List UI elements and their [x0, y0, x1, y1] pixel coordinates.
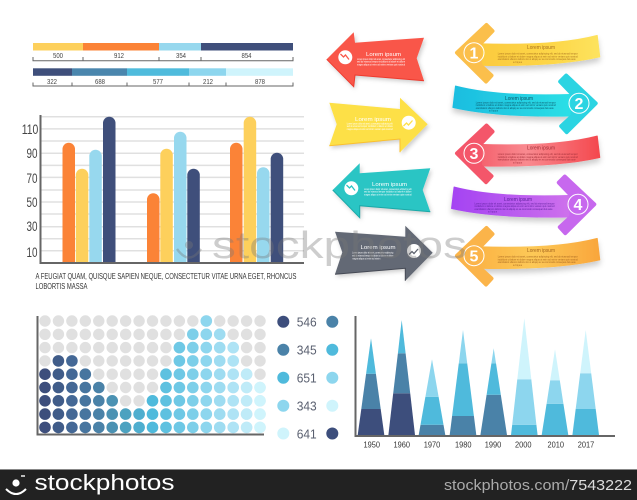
arrow: yellow right: [329, 98, 428, 152]
legend: [277, 314, 338, 442]
arrow text: Lorem ipsum dolor sit amet, consectetur adipiscing elit: [364, 187, 412, 191]
triangle chart: [356, 316, 615, 449]
year labels: 2000: [515, 440, 532, 449]
triangle 1960: [388, 320, 415, 435]
arrow text: [364, 182, 412, 196]
y axis labels: 110: [22, 122, 38, 137]
footer url: stockphotos.com/ 7543222: [444, 477, 632, 494]
numbered arrow 1: incididunt ut labore et dolore magna aliqua ut enim ad minim veniam quis nostrud: [498, 54, 578, 58]
segmented bar: warm: 354: [176, 53, 186, 60]
numbered arrow 4: Lorem ipsum dolor sit amet, consectetur adipiscing elit, sed do eiusmod tempor: [474, 202, 555, 206]
triangle 2017: [572, 330, 599, 435]
segmented bar: blue: 212: [203, 79, 213, 86]
bar group 2: [147, 132, 200, 262]
arrow: red left: [327, 32, 424, 87]
arrow: grey right: [335, 226, 433, 281]
numbered arrow 5: aliqua: [513, 263, 523, 267]
bar chart: [22, 115, 304, 263]
arrow text: Lorem ipsum: [372, 182, 407, 188]
numbered arrow 1: exercitation ullamco laboris nisi ut aliquip ex ea commodo consequat duis aute: [498, 57, 576, 61]
y axis labels: 90: [26, 146, 38, 161]
numbered arrow 2: exercitation ullamco laboris nisi ut aliquip ex ea commodo consequat duis aute: [476, 106, 554, 110]
numbered arrow 1: Lorem ipsum dolor sit amet, consectetur adipiscing elit, sed do eiusmod tempor: [498, 52, 578, 56]
numbered arrow 3: aliqua: [513, 161, 523, 165]
numbered arrow 2: Lorem ipsum dolor sit amet, consectetur adipiscing elit, sed do eiusmod tempor: [476, 100, 556, 104]
bar group 1: [62, 117, 116, 262]
icon: chart circle: [344, 181, 358, 195]
numbered arrow 4: Lorem ipsum: [504, 197, 532, 203]
numbered arrow 1: 1: [470, 46, 479, 62]
legend: 343: [297, 398, 317, 414]
numbered arrow 2: 2: [575, 96, 584, 113]
numbered arrow 2: Lorem ipsum: [505, 96, 533, 102]
year labels: 2017: [578, 440, 595, 449]
arrow: teal left: [333, 163, 430, 218]
arrow text: sed do eiusmod tempor incididunt ut labore et dolore: [347, 124, 393, 128]
watermark: stockphotos: [212, 225, 467, 267]
legend: 546: [297, 314, 317, 330]
numbered arrow 2: aliqua: [489, 109, 499, 113]
numbered arrow 4: incididunt ut labore et dolore magna aliqua ut enim ad minim veniam quis nostrud: [474, 204, 555, 208]
segmented bar: blue: 577: [153, 79, 163, 86]
y axis labels: [22, 122, 38, 260]
arrow text: Lorem ipsum dolor sit amet, consectetur adipiscing elit: [357, 57, 405, 61]
arrow text: Lorem ipsum dolor sit amet, consectetur adipiscing elit: [347, 122, 393, 126]
arrow text: magna aliqua ut enim ad minim veniam quis nostrud: [357, 62, 405, 66]
arrow text: magna aliqua ut enim ad minim veniam quis nostrud: [364, 192, 412, 196]
arrow text: magna aliqua ut enim ad minim: [352, 256, 380, 260]
numbered arrow 4: exercitation ullamco laboris nisi ut aliquip ex ea commodo consequat duis aute: [474, 207, 553, 211]
year labels: 1990: [485, 440, 502, 449]
numbered arrow 4: 4: [574, 197, 583, 214]
year labels: 1950: [363, 440, 380, 449]
numbered arrow 2: [453, 76, 596, 132]
numbered arrow 2: incididunt ut labore et dolore magna aliqua ut enim ad minim veniam quis nostrud: [476, 103, 556, 107]
arrow text: Lorem ipsum: [360, 245, 396, 251]
legend: 345: [297, 342, 317, 358]
arrow text: [357, 52, 405, 66]
arrow text: magna aliqua ut enim ad minim veniam quis nostrud: [347, 127, 393, 131]
year labels: 1980: [455, 440, 472, 449]
bar group 3: [230, 117, 283, 262]
numbered arrow 3: [457, 126, 600, 182]
icon: chart circle: [338, 50, 352, 64]
y axis labels: 70: [26, 171, 38, 186]
year labels: 1960: [393, 440, 410, 449]
numbered arrow 3: 3: [470, 146, 479, 163]
legend: 651: [297, 370, 317, 386]
numbered arrow 3: exercitation ullamco laboris nisi ut aliquip ex ea commodo consequat duis aute: [498, 158, 576, 162]
icon: chart circle: [407, 244, 421, 258]
chart caption: LOBORTIS MASSA: [36, 282, 88, 291]
y axis labels: 50: [26, 195, 38, 210]
numbered arrow 5: Lorem ipsum dolor sit amet, consectetur adipiscing elit, sed do eiusmod tempor: [498, 254, 578, 258]
segmented bar: warm: [33, 43, 293, 61]
arrow text: Lorem ipsum dolor sit amet, consectetur adipiscing: [352, 251, 394, 255]
segmented bar: blue: 688: [95, 79, 105, 86]
arrow text: sed do eiusmod tempor incididunt ut labore et dolore: [357, 60, 405, 64]
segmented bar: blue: 322: [47, 79, 57, 86]
footer logo: stockphotos: [34, 470, 174, 495]
footer band: [0, 469, 637, 500]
numbered arrow 5: [457, 228, 600, 284]
footer logo: [6, 470, 174, 495]
triangle 2010: [542, 349, 568, 435]
numbered arrow 3: Lorem ipsum: [527, 146, 555, 152]
numbered arrow 5: 5: [470, 248, 479, 266]
chart caption: [36, 272, 296, 291]
y axis labels: 30: [26, 219, 38, 234]
triangle 1970: [419, 359, 445, 435]
arrow text: Lorem ipsum: [355, 117, 391, 123]
segmented bar: blue: 878: [255, 79, 265, 86]
numbered arrow 5: exercitation ullamco laboris nisi ut aliquip ex ea commodo consequat duis aute: [498, 260, 576, 264]
arrow text: sed do eiusmod tempor incididunt ut labore et dolore: [352, 254, 394, 258]
numbered arrow 1: Lorem ipsum: [527, 45, 555, 51]
y axis labels: 10: [26, 245, 38, 260]
numbered arrow 1: [457, 25, 600, 82]
numbered arrow 4: [452, 177, 594, 233]
numbered arrow 3: Lorem ipsum dolor sit amet, consectetur adipiscing elit, sed do eiusmod tempor: [498, 152, 578, 156]
watermark: [177, 225, 467, 267]
triangle 1990: [480, 348, 507, 435]
triangle 1950: [358, 338, 384, 435]
chart caption: A FEUGIAT QUAM, QUISQUE SAPIEN NEQUE, CONSECTETUR VITAE URNA EGET, RHONCUS: [36, 272, 296, 281]
legend: 641: [297, 426, 317, 442]
numbered arrow 5: Lorem ipsum: [527, 248, 555, 254]
numbered arrow 4: aliqua: [488, 210, 498, 214]
arrow text: [347, 117, 393, 131]
arrow text: [352, 245, 396, 260]
numbered arrow 1: aliqua: [513, 60, 523, 64]
segmented bar: blue: [33, 68, 293, 86]
dot matrix chart: [38, 315, 266, 434]
numbered arrow 3: incididunt ut labore et dolore magna aliqua ut enim ad minim veniam quis nostrud: [498, 155, 578, 159]
icon: chart circle: [402, 116, 416, 130]
year labels: 1970: [424, 440, 441, 449]
year labels: [363, 440, 595, 449]
segmented bar: warm: 854: [242, 53, 252, 60]
triangle 1980: [450, 330, 476, 435]
triangle 2000: [511, 318, 538, 435]
arrow text: sed do eiusmod tempor incididunt ut labore et dolore: [364, 190, 412, 194]
numbered arrow 5: incididunt ut labore et dolore magna aliqua ut enim ad minim veniam quis nostrud: [498, 258, 578, 262]
segmented bar: warm: 500: [53, 53, 63, 60]
year labels: 2010: [547, 440, 564, 449]
arrow text: Lorem ipsum: [366, 52, 401, 58]
segmented bar: warm: 912: [114, 53, 124, 60]
